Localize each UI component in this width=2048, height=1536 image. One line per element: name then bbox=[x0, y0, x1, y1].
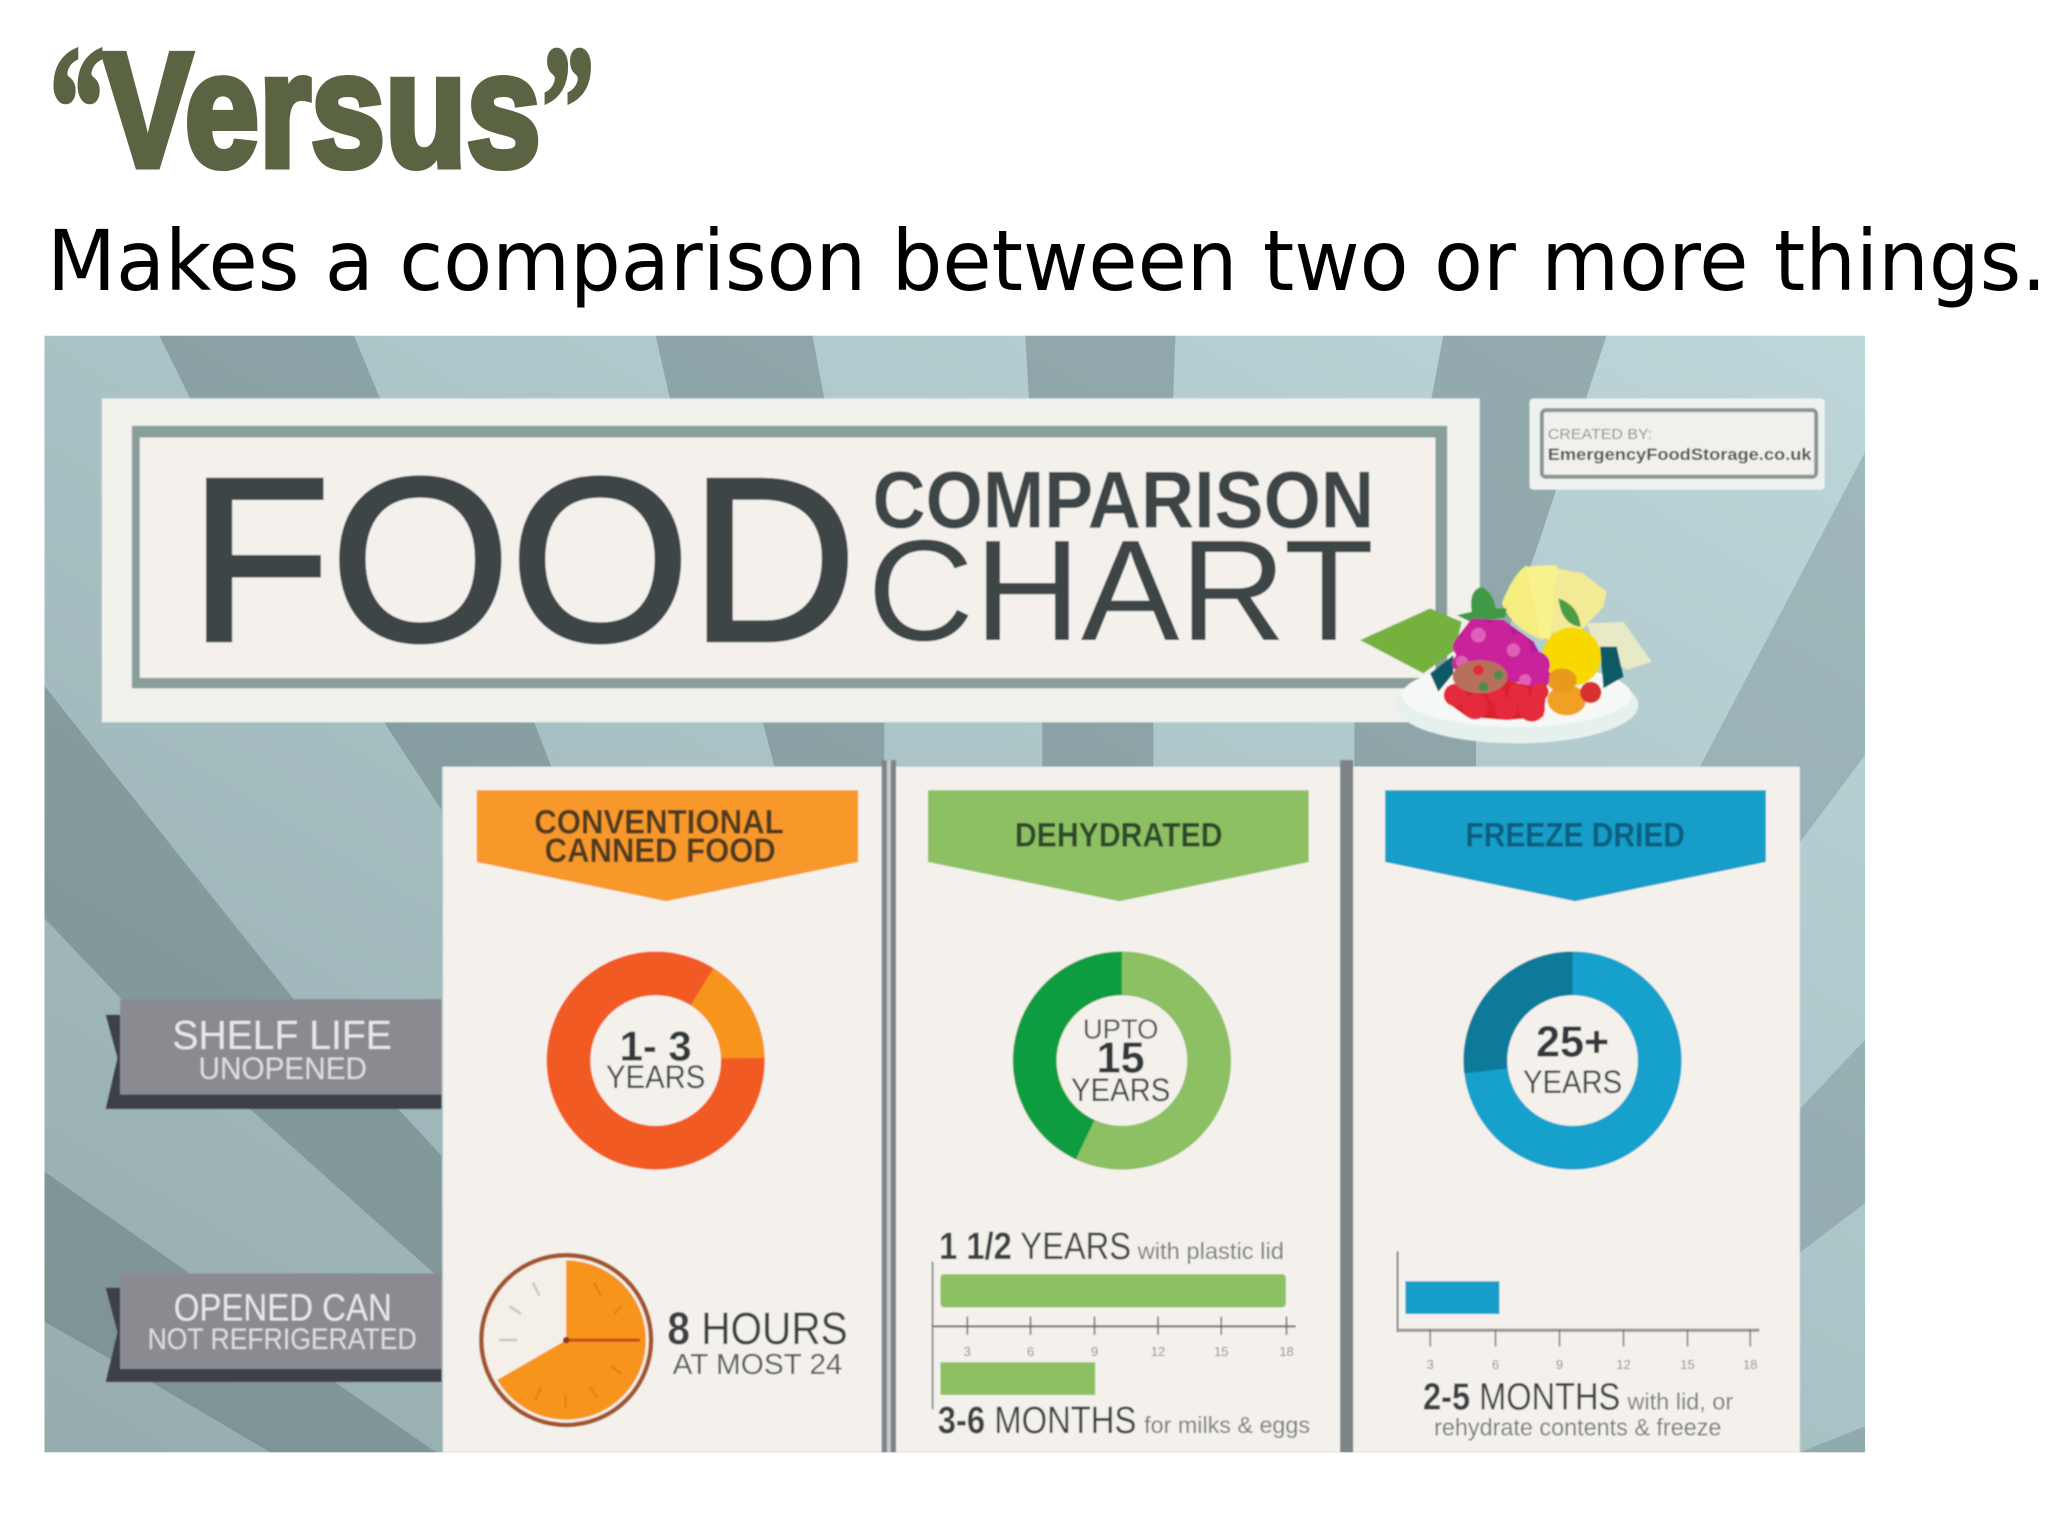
bar chart: dehydrated storage: 12 bbox=[1151, 1344, 1165, 1359]
text: 1 1/2 years with plastic lid: 1 1/2 YEARS bbox=[939, 1226, 1131, 1268]
donut chart: up to 15 years: UPTO bbox=[1083, 1013, 1158, 1044]
text: 8 hours at most 24: AT MOST 24 bbox=[673, 1349, 842, 1381]
panel: comparison columns bbox=[443, 760, 1800, 1452]
bar chart: freeze dried storage: 6 bbox=[1492, 1357, 1499, 1372]
label: opened can not refrigerated: NOT REFRIGERATED bbox=[148, 1323, 417, 1356]
food comparison infographic bbox=[44, 336, 1865, 1452]
text: 1 1/2 years with plastic lid bbox=[939, 1226, 1284, 1268]
banner: freeze dried: FREEZE DRIED bbox=[1465, 816, 1685, 854]
banner: dehydrated bbox=[928, 790, 1309, 901]
text: 3-6 months for milks and eggs: 3-6 MONTHS bbox=[938, 1400, 1136, 1442]
banner: dehydrated: DEHYDRATED bbox=[1015, 816, 1223, 854]
text: 2-5 months with lid or rehydrate bbox=[1423, 1376, 1733, 1441]
column: dehydrated bbox=[928, 790, 1310, 1442]
donut chart: up to 15 years: YEARS bbox=[1071, 1071, 1170, 1108]
label: shelf life unopened: SHELF LIFE bbox=[172, 1012, 392, 1058]
label: opened can not refrigerated: OPENED CAN bbox=[174, 1287, 392, 1329]
column: freeze dried bbox=[1385, 790, 1766, 1441]
title: ” bbox=[542, 12, 594, 203]
panel: food comparison chart header bbox=[102, 398, 1480, 722]
text: 2-5 months with lid or rehydrate: 2-5 MONTHS bbox=[1423, 1376, 1620, 1418]
clock: 8 hours bbox=[481, 1255, 651, 1425]
bar chart: freeze dried storage: 15 bbox=[1680, 1357, 1695, 1372]
heading: comparison: COMPARISON bbox=[872, 456, 1374, 546]
text: 8 hours at most 24: 8 HOURS bbox=[667, 1303, 848, 1354]
banner: conventional canned food: CONVENTIONAL bbox=[534, 803, 784, 841]
label: shelf life unopened: UNOPENED bbox=[199, 1051, 367, 1086]
text: 8 hours at most 24 bbox=[667, 1303, 848, 1381]
text: 2-5 months with lid or rehydrate: rehydrate contents & freeze bbox=[1434, 1414, 1721, 1441]
credit badge: CREATED BY: bbox=[1548, 427, 1652, 443]
donut chart: 1-3 years: 1- 3 bbox=[620, 1023, 692, 1070]
title: “ bbox=[50, 12, 104, 203]
donut chart: 25+ years: 25+ bbox=[1536, 1019, 1609, 1067]
text: 2-5 months with lid or rehydrate: with lid, or bbox=[1626, 1388, 1733, 1414]
heading: chart: CHART bbox=[867, 511, 1374, 671]
bar chart: freeze dried storage: 12 bbox=[1616, 1357, 1631, 1372]
bar chart: dehydrated storage: 15 bbox=[1214, 1344, 1228, 1359]
column: conventional canned food bbox=[477, 790, 858, 1425]
label: opened can not refrigerated bbox=[106, 1273, 441, 1382]
bar chart: freeze dried storage: 18 bbox=[1743, 1357, 1757, 1372]
bar chart: dehydrated storage: 3 bbox=[964, 1344, 971, 1359]
bar chart: freeze dried storage bbox=[1398, 1251, 1759, 1441]
donut chart: up to 15 years: 15 bbox=[1097, 1034, 1145, 1082]
donut chart: 1-3 years bbox=[547, 952, 765, 1170]
bar chart: dehydrated storage: 18 bbox=[1279, 1344, 1294, 1359]
text: 1 1/2 years with plastic lid: with plastic lid bbox=[1137, 1238, 1284, 1264]
title: Versus bbox=[103, 20, 541, 201]
icon: fruit plate bbox=[1360, 565, 1652, 743]
donut chart: 25+ years: YEARS bbox=[1523, 1063, 1622, 1100]
banner: freeze dried bbox=[1385, 790, 1766, 901]
credit badge bbox=[1529, 398, 1825, 490]
text: 3-6 months for milks and eggs bbox=[938, 1400, 1310, 1442]
donut chart: 25+ years bbox=[1463, 952, 1682, 1170]
credit badge: EmergencyFoodStorage.co.uk bbox=[1548, 446, 1813, 464]
banner: conventional canned food: CANNED FOOD bbox=[545, 832, 776, 870]
bar chart: dehydrated storage bbox=[933, 1226, 1310, 1442]
bar chart: freeze dried storage: 3 bbox=[1427, 1357, 1434, 1372]
heading: food: FOOD bbox=[189, 431, 857, 690]
donut chart: 1-3 years: YEARS bbox=[606, 1058, 705, 1095]
text: 3-6 months for milks and eggs: for milks & eggs bbox=[1144, 1412, 1310, 1438]
label: shelf life unopened bbox=[106, 999, 441, 1109]
bar chart: dehydrated storage: 9 bbox=[1091, 1344, 1098, 1359]
banner: conventional canned food bbox=[477, 790, 858, 901]
donut chart: up to 15 years bbox=[1013, 952, 1231, 1170]
bar chart: dehydrated storage: 6 bbox=[1027, 1344, 1034, 1359]
bar chart: freeze dried storage: 9 bbox=[1556, 1357, 1563, 1372]
